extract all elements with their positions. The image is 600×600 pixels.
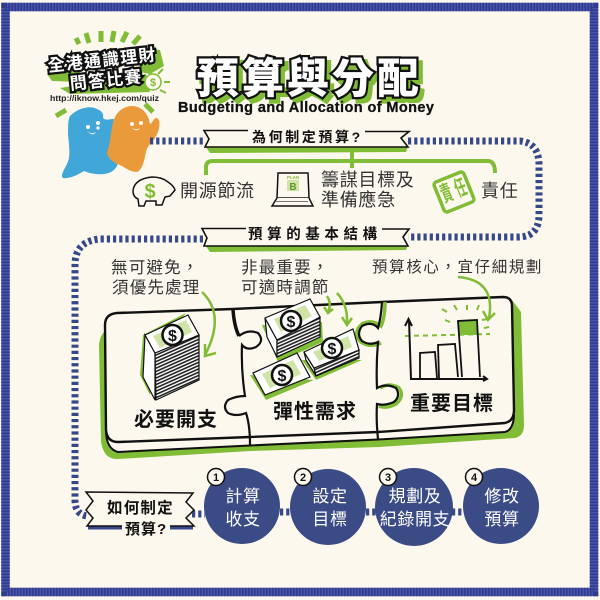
mascot faces (86, 121, 143, 134)
step text second line: 紀錄開支 (380, 510, 450, 529)
banner blue underline (88, 526, 193, 530)
arrow: flexible large (337, 293, 352, 325)
step number: 3 (385, 472, 391, 484)
money stack: essential (140, 313, 199, 400)
title (197, 55, 426, 106)
stack top bill (145, 315, 199, 353)
title main text: 預算與分配 (197, 55, 422, 102)
icon: seal stamp: 責 (437, 180, 456, 207)
logo: quiz competition (47, 31, 170, 116)
step 3 (375, 468, 453, 546)
icon: piggy bank: $ (144, 181, 156, 203)
banner green shadow (205, 146, 408, 153)
icon: seal stamp (433, 171, 475, 213)
banner outline (204, 130, 409, 147)
money stack one: $ (287, 314, 296, 331)
step text: 計算 (225, 486, 261, 506)
item: plan (272, 170, 414, 210)
item text: 責任 (481, 181, 518, 201)
callout: core: 預算核心，宜仔細規劃 (372, 258, 543, 276)
step text second line: 預算 (484, 509, 520, 529)
step circle (290, 469, 366, 545)
banner green shadow (205, 245, 408, 252)
bar chart (405, 305, 490, 381)
money single bill: $ (278, 368, 287, 385)
icon: plan B laptop (272, 173, 313, 206)
green target bar fill (458, 320, 478, 335)
puzzle page stack (106, 416, 514, 452)
callout text second line: 須優先處理 (112, 278, 200, 297)
step text: 規劃及 (389, 487, 441, 506)
puzzle dividers (225, 302, 398, 445)
money group: flexible (250, 299, 362, 400)
stack sides (143, 335, 155, 400)
callout text: 非最重要， (241, 258, 330, 277)
step text second line: 目標 (312, 510, 348, 529)
banner: why budget (204, 129, 409, 153)
callout text second line: 可適時調節 (241, 278, 330, 297)
step number: 1 (213, 472, 219, 484)
logo green swash (47, 47, 164, 94)
step number: 2 (300, 472, 306, 484)
subtitle: Budgeting and Allocation of Money (178, 100, 434, 116)
banner outline (202, 228, 409, 246)
title green shadow: 預算與分配 (201, 59, 426, 106)
item: open source (133, 177, 255, 206)
step text second line: 收支 (225, 510, 261, 529)
arrow: flexible small (324, 296, 333, 313)
white gap behind second line (122, 519, 170, 533)
banner: how to budget (86, 492, 194, 538)
axes (405, 319, 487, 381)
callout arrows (202, 277, 495, 356)
label: important goals: 重要目標 (410, 392, 494, 415)
dollar coin: $ (168, 328, 177, 345)
green highlight rays (442, 305, 489, 328)
logo url: http://iknow.hkej.com/quiz (50, 93, 159, 103)
step 2 (290, 468, 366, 545)
banner heading line two: 預算? (125, 520, 167, 538)
blue mascot (62, 107, 118, 178)
icon: plan B laptop: PLAN (287, 175, 299, 180)
icon: plan B laptop: B (289, 182, 297, 193)
step text: 設定 (312, 487, 348, 506)
bars (420, 320, 480, 378)
step text: 修改 (484, 487, 520, 506)
logo dollar coin: $ (150, 77, 156, 89)
step 4 (463, 468, 539, 544)
puzzle green knob highlights (357, 302, 401, 407)
green shadow (250, 322, 362, 400)
banner heading: 預算的基本結構 (248, 225, 382, 243)
banner outline (86, 492, 194, 526)
stack green shadow (140, 313, 186, 395)
step circle (375, 468, 453, 546)
label: essential spending: 必要開支 (134, 408, 218, 431)
puzzle green shadow (99, 300, 524, 459)
item text second line: 準備應急 (321, 189, 396, 210)
step circle (463, 468, 539, 544)
puzzle book (99, 297, 524, 459)
banner heading line one: 如何制定 (107, 498, 174, 517)
arrow: essential (202, 292, 216, 356)
icon: seal stamp: 任 (451, 174, 470, 202)
bill green tint (153, 320, 192, 348)
step number: 4 (471, 472, 478, 484)
logo heading line one: 全港通識理財 (47, 44, 157, 76)
logo heading line two: 問答比賽 (69, 66, 143, 94)
banner heading: 為何制定預算? (252, 129, 363, 145)
money stack two: $ (328, 341, 337, 358)
logo green rays (56, 31, 170, 116)
callout text: 無可避免， (111, 258, 200, 277)
arrow: core (458, 277, 495, 320)
step 1 (204, 468, 280, 544)
item text: 籌謀目標及 (321, 170, 414, 190)
green tree connector (206, 150, 495, 175)
callout: flexible (241, 258, 330, 297)
puzzle top face (105, 297, 514, 442)
mascots (62, 106, 159, 178)
stack front lines (155, 335, 199, 400)
item: responsibility (433, 171, 518, 213)
orange mascot (107, 106, 159, 172)
callout: essential (111, 258, 200, 297)
step circle (204, 468, 280, 544)
label: flexible demand: 彈性需求 (273, 400, 357, 423)
banner: basic structure (202, 225, 409, 252)
item text: 開源節流 (180, 181, 255, 201)
target dashed line (405, 334, 490, 336)
dashed connector lines (75, 141, 539, 516)
